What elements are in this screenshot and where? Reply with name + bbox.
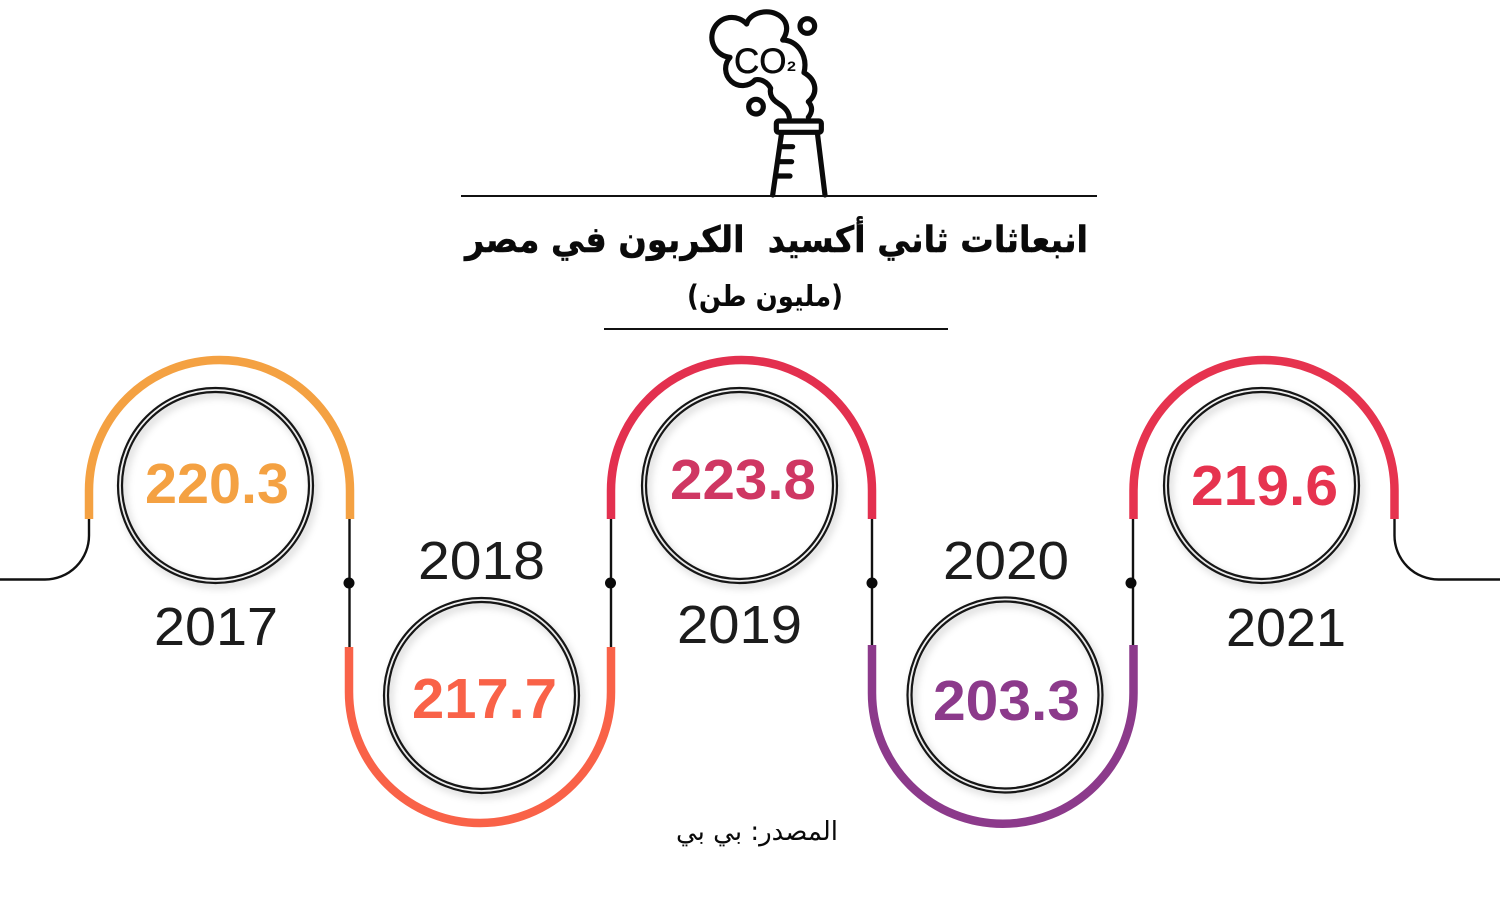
ring 2020 — [908, 598, 1102, 792]
value 2017: 220.3 — [145, 452, 289, 516]
icon: CO2 factory chimney — [712, 12, 825, 195]
segment: 2018 — [349, 531, 611, 823]
year 2017: 2017 — [154, 597, 278, 657]
value 2018: 217.7 — [412, 667, 557, 731]
icon: CO2 factory chimney: 2 — [787, 58, 796, 74]
ring 2018 — [384, 598, 579, 793]
value 2020: 203.3 — [933, 669, 1080, 733]
value 2021: 219.6 — [1191, 454, 1338, 518]
ring 2017 — [118, 388, 313, 583]
orange arc — [89, 360, 350, 519]
ring 2019 — [642, 388, 837, 583]
icon: CO2 factory chimney: CO — [734, 42, 786, 81]
top divider line — [461, 195, 1097, 197]
ring 2021 — [1164, 388, 1359, 583]
segment: 2019 — [611, 360, 872, 655]
red arc — [1134, 360, 1394, 519]
red arc — [611, 360, 872, 519]
segment: 2021 — [1134, 360, 1394, 658]
year 2018: 2018 — [418, 531, 545, 591]
connector: black timeline lines and dots — [0, 517, 1500, 650]
value 2019: 223.8 — [670, 448, 816, 512]
subtitle: unit: (مليون طن) — [687, 279, 843, 313]
purple arc — [872, 645, 1134, 824]
source note: المصدر: بي بي — [676, 817, 838, 847]
year 2021: 2021 — [1226, 598, 1346, 658]
coral arc — [349, 647, 611, 823]
year 2019: 2019 — [677, 595, 802, 655]
title: انبعاثات ثاني أكسيد الكربون في مصر — [463, 216, 1088, 261]
lower divider line — [604, 328, 948, 330]
segment: 2020 — [872, 531, 1134, 824]
year 2020: 2020 — [943, 531, 1069, 591]
segment: 2017 — [89, 360, 350, 657]
